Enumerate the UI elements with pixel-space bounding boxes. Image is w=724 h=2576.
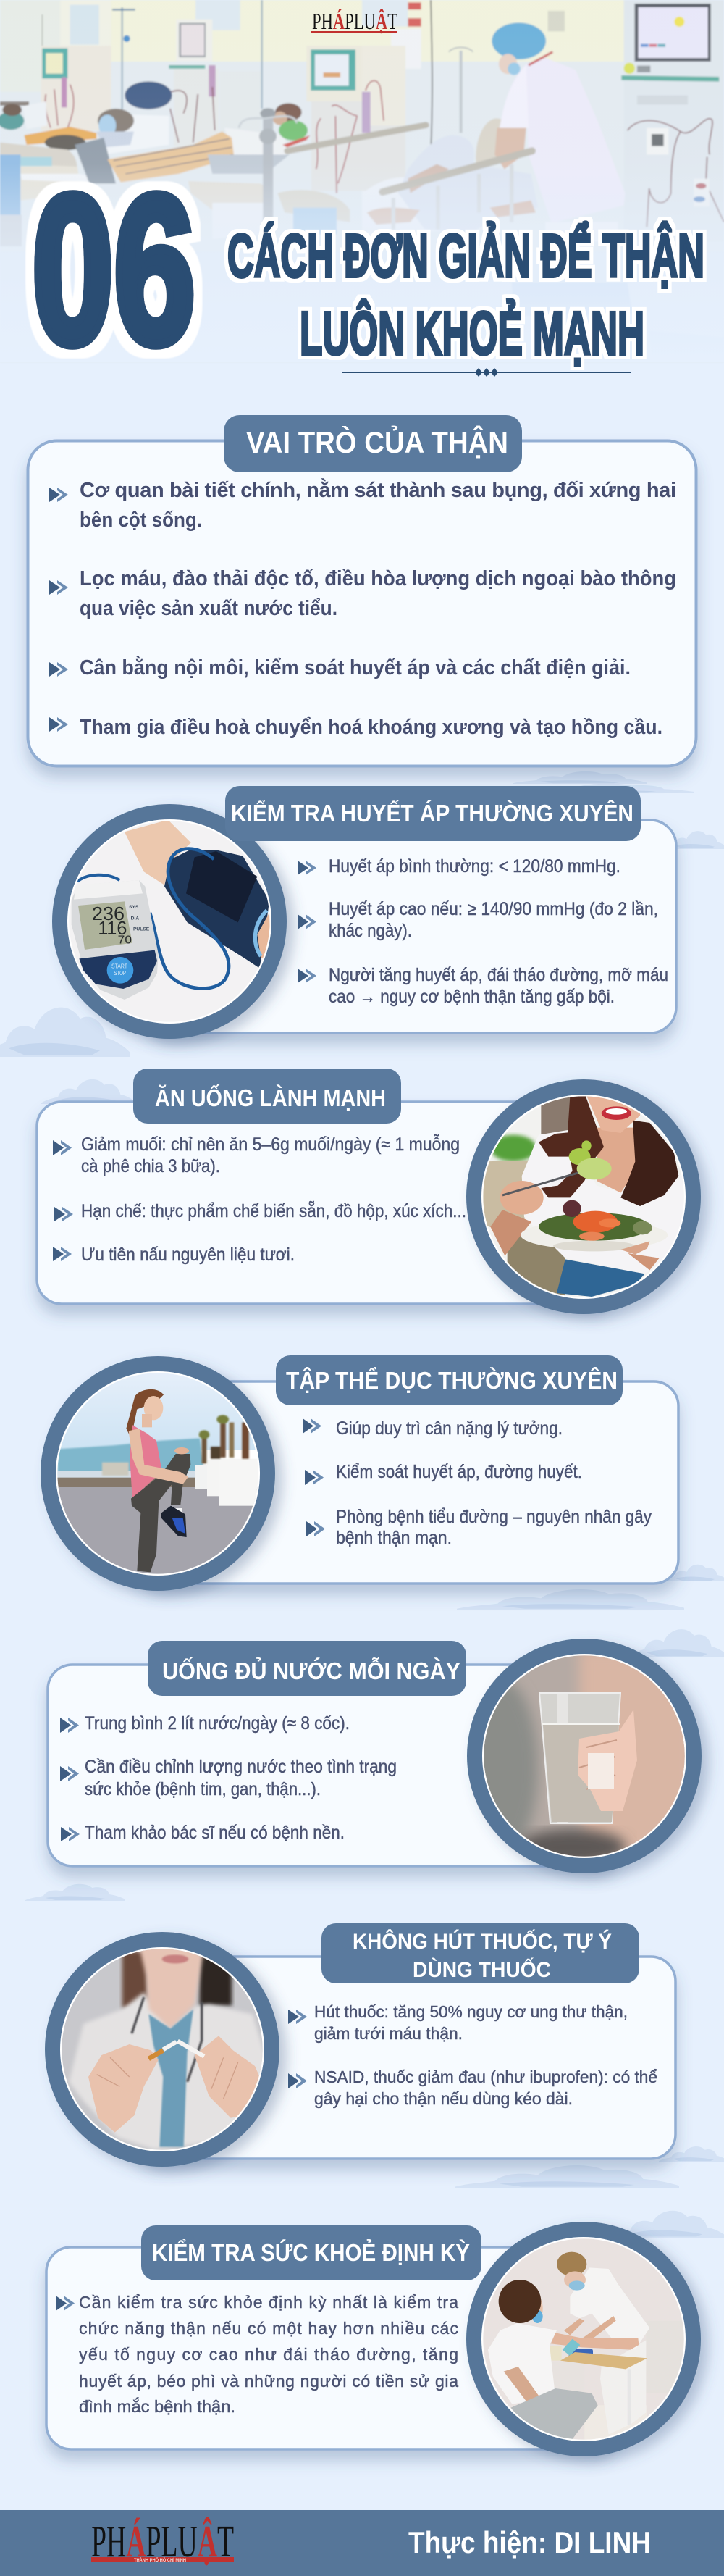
bullet list: Hạn chế: thực phẩm chế biến sẵn, đồ hộp, xúc xích... (81, 1200, 466, 1221)
photo circle: glass of water (467, 1639, 702, 1873)
photo circle: blood pressure monitor: 236 (92, 903, 125, 924)
panel card (46, 2247, 618, 2449)
panel: uống đủ nước (48, 1639, 702, 1873)
bullet list: cà phê chia 3 bữa). (81, 1156, 220, 1176)
bullet list: bệnh thận mạn. (336, 1528, 452, 1548)
photo circle: woman eating salad (466, 1079, 701, 1314)
bullet list: Người tăng huyết áp, đái tháo đường, mỡ máu (329, 965, 668, 985)
panel: không hút thuốc (45, 1923, 675, 2167)
bullet list: Trung bình 2 lít nước/ngày (≈ 8 cốc). (85, 1713, 350, 1734)
panel card (145, 820, 676, 1033)
bullet list: Tham khảo bác sĩ nếu có bệnh nền. (85, 1823, 345, 1843)
bullet list (303, 1418, 652, 1548)
photo circle: breaking a cigarette (45, 1932, 279, 2167)
panel card (37, 1102, 616, 1304)
photo circle: blood pressure monitor: 70 (118, 934, 132, 947)
bullet list: Cân bằng nội môi, kiểm soát huyết áp và các chất điện giải. (80, 655, 631, 679)
bullet list: khác ngày). (329, 921, 412, 941)
bullet list (49, 477, 676, 739)
logo: Pháp Luật top: PHÁPLUẬT (312, 8, 397, 34)
bullet list: Lọc máu, đào thải độc tố, điều hòa lượng dịch ngoại bào thông (80, 567, 676, 590)
bullet list: Tham gia điều hoà chuyển hoá khoáng xương và tạo hồng cầu. (80, 716, 662, 739)
bullet list: Ưu tiên nấu nguyên liệu tươi. (81, 1245, 295, 1265)
bullet list (60, 1713, 397, 1843)
bullet list: giảm tưới máu thận. (314, 2024, 463, 2043)
photo circle: blood pressure monitor: PULSE (133, 927, 150, 932)
bullet text (56, 2293, 458, 2416)
footer band (0, 2510, 724, 2576)
panel heading (141, 2225, 481, 2280)
panel: kiểm tra sức khoẻ định kỳ (46, 2222, 701, 2456)
header photo: dialysis ward (0, 0, 724, 362)
bullet list: Giúp duy trì cân nặng lý tưởng. (336, 1418, 563, 1439)
title number 06: 06 (32, 151, 195, 388)
panel heading: KIỂM TRA HUYẾT ÁP THƯỜNG XUYÊN (231, 800, 634, 827)
panel: kiểm tra huyết áp (52, 786, 676, 1039)
photo circle: blood pressure monitor: 116 (98, 917, 127, 939)
panel heading: DÙNG THUỐC (413, 1957, 551, 1982)
title text (227, 222, 704, 367)
photo circle: medical check-up (466, 2222, 701, 2456)
bullet list: NSAID, thuốc giảm đau (như ibuprofen): có thể (314, 2067, 657, 2086)
bullet text: Cần kiểm tra sức khỏe định kỳ nhất là kiểm tra (79, 2293, 458, 2312)
panel: ăn uống lành mạnh (37, 1069, 701, 1314)
bullet list: gây hại cho thận nếu dùng kéo dài. (314, 2089, 573, 2108)
bullet text: đình mắc bệnh thận. (79, 2397, 235, 2416)
panel card (28, 440, 696, 766)
panel heading: TẬP THỂ DỤC THƯỜNG XUYÊN (286, 1367, 618, 1394)
panel heading: ĂN UỐNG LÀNH MẠNH (155, 1084, 386, 1111)
photo circle: blood pressure monitor: STOP (114, 969, 126, 977)
bullet list: Kiểm soát huyết áp, đường huyết. (336, 1462, 582, 1482)
photo circle: blood pressure monitor: START (111, 963, 128, 970)
bullet text: yếu tố nguy cơ cao như đái tháo đường, tăng (79, 2345, 458, 2364)
panel heading: KIỂM TRA SỨC KHOẺ ĐỊNH KỲ (152, 2239, 470, 2266)
bullet text: huyết áp, béo phì và những người có tiền sử gia (79, 2372, 458, 2391)
bullet list: Giảm muối: chỉ nên ăn 5–6g muối/ngày (≈ 1 muỗng (81, 1134, 460, 1155)
bullet list (53, 1134, 466, 1265)
panel heading (225, 786, 641, 841)
bullet list: Cơ quan bài tiết chính, nằm sát thành sau bụng, đối xứng hai (80, 477, 676, 502)
panel heading (321, 1923, 639, 1983)
bullet list: qua việc sản xuất nước tiểu. (80, 597, 337, 620)
bullet list: Cần điều chỉnh lượng nước theo tình trạng (85, 1757, 397, 1777)
panel heading: VAI TRÒ CỦA THẬN (246, 425, 508, 459)
footer logo: PHÁPLUẬT (91, 2517, 234, 2567)
footer logo: THÀNH PHỐ HỒ CHÍ MINH (134, 2557, 186, 2563)
panel card (138, 1957, 675, 2159)
panel: vai trò của thận (28, 415, 696, 766)
bullet list: Hút thuốc: tăng 50% nguy cơ ung thư thận, (314, 2002, 628, 2021)
panel heading (148, 1641, 466, 1696)
bullet list: Huyết áp cao nếu: ≥ 140/90 mmHg (đo 2 lần, (329, 899, 658, 919)
panel heading (276, 1355, 623, 1405)
panel heading (224, 415, 522, 472)
panel card (138, 1381, 678, 1584)
credit: Thực hiện: DI LINH (408, 2525, 651, 2559)
bullet list: Huyết áp bình thường: < 120/80 mmHg. (329, 856, 620, 877)
bullet list: Phòng bệnh tiểu đường – nguyên nhân gây (336, 1507, 652, 1527)
panel: tập thể dục (41, 1355, 678, 1591)
photo circle: blood pressure monitor (52, 804, 287, 1039)
photo circle: blood pressure monitor: SYS (129, 905, 139, 910)
panel heading (133, 1069, 401, 1124)
photo circle: blood pressure monitor: DIA (131, 916, 139, 921)
panel heading: KHÔNG HÚT THUỐC, TỰ Ý (353, 1929, 612, 1954)
bullet list (298, 856, 668, 1007)
bullet list (288, 2002, 657, 2108)
panel heading: UỐNG ĐỦ NƯỚC MỖI NGÀY (162, 1657, 460, 1684)
panel card (48, 1665, 620, 1866)
bullet text: chức năng thận nếu có một hay hơn nhiều các (79, 2319, 458, 2338)
background clouds (0, 771, 724, 2238)
title divider with diamonds (342, 368, 631, 377)
bullet list: cao → nguy cơ bệnh thận tăng gấp bội. (329, 987, 615, 1007)
bullet list: sức khỏe (bệnh tim, gan, thận...). (85, 1779, 321, 1799)
photo circle: woman stretching (41, 1356, 275, 1591)
header fade overlay (0, 0, 724, 362)
bullet list: bên cột sống. (80, 509, 202, 532)
